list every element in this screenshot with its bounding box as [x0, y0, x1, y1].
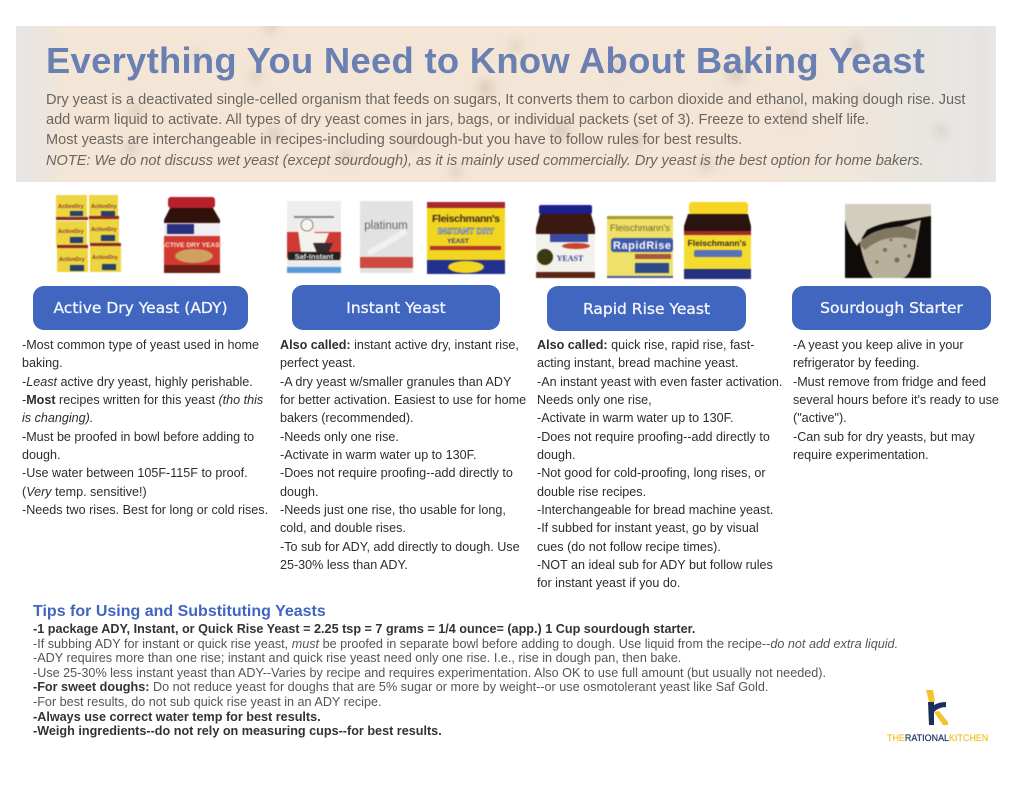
image: platinum packet: platinum	[364, 220, 408, 232]
image: red star yeast jar: YEAST	[557, 254, 584, 263]
image: fleischmann's instant packet	[426, 201, 506, 275]
text: sourdough starter notes: -Must remove from fridge and feed	[793, 375, 986, 389]
text: rapid rise yeast notes: acting instant, bread machine yeast.	[537, 356, 738, 370]
text: instant yeast notes: perfect yeast.	[280, 356, 356, 370]
text: instant yeast notes: bakers (recommended).	[280, 411, 414, 425]
image: active dry yeast packets: ActiveDry	[59, 257, 86, 263]
image: active dry yeast packets: ActiveDry	[58, 229, 85, 235]
button: rapid rise yeast: Rapid Rise Yeast	[583, 300, 710, 318]
button: rapid rise yeast	[547, 286, 746, 331]
text: rapid rise yeast notes	[537, 338, 782, 590]
text: instant yeast notes: Also called: instant active dry, instant rise,	[280, 338, 519, 352]
image: active dry yeast packets: ActiveDry	[92, 255, 119, 261]
text: rapid rise yeast notes: -NOT an ideal sub for ADY but follow rules	[537, 558, 773, 572]
text: rapid rise yeast notes: -Activate in warm water up to 130F.	[537, 411, 733, 425]
image: red star jar: ACTIVE DRY YEAST	[160, 242, 224, 249]
text: sourdough starter notes: -A yeast you keep alive in your	[793, 338, 964, 352]
image: fleischmann's instant packet: Fleischmann's	[432, 213, 500, 225]
tips list: -1 package ADY, Instant, or Quick Rise Yeast = 2.25 tsp = 7 grams = 1/4 ounce= (app.) 1 Cup sourdough starter.	[33, 622, 695, 636]
button: sourdough starter	[792, 286, 991, 330]
text: rapid rise yeast notes: Needs only one rise,	[537, 393, 652, 407]
intro text: add warm liquid to activate. All types of dry yeast comes in jars, bags, or individual packets (set of 3). Freeze to extend shelf life.	[46, 112, 869, 128]
button: active dry yeast: Active Dry Yeast (ADY)	[53, 299, 228, 317]
text: instant yeast notes: -Does not require proofing--add directly to	[280, 466, 513, 480]
text: sourdough starter notes: ("active").	[793, 411, 847, 425]
logo: the rational kitchen: THERATIONALKITCHEN	[887, 733, 988, 743]
text: sourdough starter notes: refrigerator by feeding.	[793, 356, 920, 370]
image: fleischmann's bread machine jar	[683, 201, 752, 280]
text: rapid rise yeast notes: Also called: quick rise, rapid rise, fast-	[537, 338, 754, 352]
text: rapid rise yeast notes: -Interchangeable for bread machine yeast.	[537, 503, 773, 517]
text: rapid rise yeast notes: -Not good for cold-proofing, long rises, or	[537, 466, 766, 480]
text: instant yeast notes: 25-30% less than ADY.	[280, 558, 408, 572]
logo: the rational kitchen	[887, 690, 988, 743]
button: instant yeast: Instant Yeast	[346, 298, 446, 316]
header banner	[16, 26, 996, 182]
text: instant yeast notes: -To sub for ADY, add directly to dough. Use	[280, 540, 520, 554]
image: saf-instant packet: Saf-Instant	[295, 252, 334, 261]
intro text: NOTE: We do not discuss wet yeast (except sourdough), as it is mainly used commercially. Dry yeast is the best option for home bakers.	[46, 153, 924, 169]
image: active dry yeast packets: ActiveDry	[91, 227, 118, 233]
text: instant yeast notes: -A dry yeast w/smaller granules than ADY	[280, 375, 511, 389]
tips list: -If subbing ADY for instant or quick rise yeast, must be proofed in separate bowl before adding to dough. Use liquid from the recipe--do not add extra liquid.	[33, 637, 898, 651]
text: instant yeast notes: dough.	[280, 485, 318, 499]
text: sourdough starter notes: require experimentation.	[793, 448, 929, 462]
text: active dry yeast notes: -Most recipes written for this yeast (tho this	[22, 393, 263, 407]
text: instant yeast notes: -Needs only one rise.	[280, 430, 399, 444]
button: active dry yeast	[33, 286, 248, 330]
text: active dry yeast notes: -Most common type of yeast used in home	[22, 338, 259, 352]
text: rapid rise yeast notes: -An instant yeast with even faster activation.	[537, 375, 782, 389]
text: rapid rise yeast notes: cues (do not follow recipe times).	[537, 540, 721, 554]
tips list: -For sweet doughs: Do not reduce yeast for doughs that are 5% sugar or more by weight--or use osmotolerant yeast like Saf Gold.	[33, 680, 768, 694]
tips list: -Always use correct water temp for best results.	[33, 710, 321, 724]
text: instant yeast notes: -Activate in warm water up to 130F.	[280, 448, 476, 462]
text: active dry yeast notes	[22, 338, 268, 517]
image: fleischmann's instant packet: YEAST	[447, 238, 469, 245]
text: rapid rise yeast notes: for instant yeast if you do.	[537, 576, 680, 590]
intro text	[46, 92, 966, 169]
title: Everything You Need to Know About Baking Yeast	[46, 40, 925, 81]
text: active dry yeast notes: -Use water between 105F-115F to proof.	[22, 466, 248, 480]
image: rapidrise packet	[606, 215, 674, 279]
tips list: -ADY requires more than one rise; instant and quick rise yeast need only one rise. I.e., rise in dough pan, then bake.	[33, 651, 681, 665]
text: rapid rise yeast notes: -Does not require proofing--add directly to	[537, 430, 770, 444]
text: sourdough starter notes: -Can sub for dry yeasts, but may	[793, 430, 975, 444]
intro text: Dry yeast is a deactivated single-celled organism that feeds on sugars, It converts them to carbon dioxide and ethanol, making dough rise. Just	[46, 92, 965, 108]
button: sourdough starter: Sourdough Starter	[820, 299, 963, 317]
text: active dry yeast notes: dough.	[22, 448, 60, 462]
tips list: -Weigh ingredients--do not rely on measuring cups--for best results.	[33, 724, 442, 738]
image: red star jar	[160, 196, 224, 274]
text: active dry yeast notes: baking.	[22, 356, 63, 370]
tips list: -For best results, do not sub quick rise yeast in an ADY recipe.	[33, 695, 382, 709]
image: sourdough starter	[844, 204, 932, 279]
text: active dry yeast notes: -Must be proofed in bowl before adding to	[22, 430, 254, 444]
image: red star yeast jar	[535, 204, 596, 279]
tips heading: Tips for Using and Substituting Yeasts	[33, 603, 326, 620]
text: active dry yeast notes: -Least active dry yeast, highly perishable.	[22, 375, 253, 389]
text: rapid rise yeast notes: double rise recipes.	[537, 485, 646, 499]
text: sourdough starter notes	[793, 338, 999, 462]
image: active dry yeast packets: ActiveDry	[58, 204, 85, 210]
image: fleischmann's instant packet: INSTANT DRY	[438, 226, 494, 236]
image: rapidrise packet: RapidRise	[613, 240, 671, 252]
image: platinum packet	[359, 200, 414, 274]
image: active dry yeast packets: ActiveDry	[91, 204, 118, 210]
text: instant yeast notes: cold, and double rises.	[280, 521, 406, 535]
image: rapidrise packet: Fleischmann's	[610, 223, 670, 234]
tips list: -Use 25-30% less instant yeast than ADY--Varies by recipe and requires experimentation. Also OK to use full amount (but usually not needed).	[33, 666, 826, 680]
text: instant yeast notes	[280, 338, 526, 572]
text: instant yeast notes: for better activation. Easiest to use for home	[280, 393, 526, 407]
text: rapid rise yeast notes: dough.	[537, 448, 575, 462]
text: active dry yeast notes: is changing).	[22, 411, 93, 425]
text: instant yeast notes: -Needs just one rise, tho usable for long,	[280, 503, 506, 517]
tips list	[33, 622, 898, 738]
text: rapid rise yeast notes: -If subbed for instant yeast, go by visual	[537, 521, 759, 535]
button: instant yeast	[292, 285, 500, 330]
intro text: Most yeasts are interchangeable in recipes-including sourdough-but you have to follow rules for best results.	[46, 132, 742, 148]
image: active dry yeast packets	[55, 194, 122, 273]
image: fleischmann's bread machine jar: Fleischmann's	[688, 238, 747, 248]
text: active dry yeast notes: (Very temp. sensitive!)	[22, 485, 147, 499]
image: saf-instant packet	[286, 201, 342, 274]
text: active dry yeast notes: -Needs two rises. Best for long or cold rises.	[22, 503, 268, 517]
text: sourdough starter notes: several hours before it's ready to use	[793, 393, 999, 407]
